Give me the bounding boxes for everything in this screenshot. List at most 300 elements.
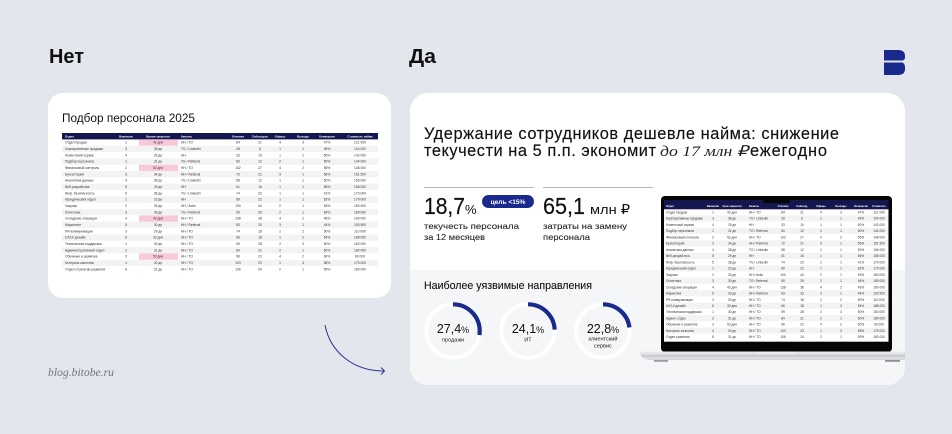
laptop table: 3 [712,242,714,246]
hiring table: 52 дня [153,166,163,170]
laptop table: 5 [712,260,714,264]
hiring table: 45% [324,147,330,151]
laptop table: 189 000 [873,279,885,283]
laptop table: 1 [712,229,714,233]
laptop table: 38 [800,285,804,289]
hiring table: Выходы [297,134,310,138]
hiring table: 58% [324,261,330,265]
laptop table: 29 дн [728,254,736,258]
hiring table: 4 [279,166,281,170]
laptop table: 18 [800,304,804,308]
hiring table: 44 [258,204,262,208]
laptop table: 33 дн [728,273,736,277]
laptop table: 2 [840,304,842,308]
laptop table: 29 [800,279,804,283]
laptop table: 6 [712,304,714,308]
laptop table: TG / Referral [749,229,768,233]
laptop table: 1 [820,217,822,221]
hiring table: HH / ТО [181,217,193,221]
hiring table: 53 дня [153,255,163,259]
laptop table: 142 000 [873,223,885,227]
stat: turnover: % [465,202,477,217]
hiring table: 189 000 [354,210,366,214]
laptop table: Конверсия [854,204,868,208]
laptop table: 1 [820,267,822,271]
laptop table: 69 [781,267,785,271]
hiring table: 6 [125,236,127,240]
hiring table: Закупки [65,204,77,208]
hiring table: 50% [324,179,330,183]
laptop table: HH / ТО [749,298,761,302]
laptop table: 150 000 [873,310,885,314]
hiring table: HH / ТО [181,255,193,259]
donut: IT [501,304,555,358]
laptop table: 41% [858,260,864,264]
hiring table: Бухгалтерия [65,172,84,176]
laptop table: Финансовый контроль [666,235,699,239]
hiring table: HH [181,153,186,157]
hiring table: 21 [258,141,262,145]
laptop table: 4 [712,248,714,252]
hiring table: 84 [236,141,240,145]
hiring table: 121 000 [354,141,366,145]
hiring table: 62% [324,198,330,202]
stat: turnover [424,188,534,242]
arrow [325,325,384,374]
laptop table: 50% [858,223,864,227]
panel: after summary [410,93,905,385]
laptop table: 52 дня [727,235,737,239]
hiring table: 151 500 [354,172,366,176]
laptop table: Отдел [666,204,674,208]
laptop table: 29 дн [728,298,736,302]
hiring table: 1 [302,185,304,189]
laptop table: Закупки [666,273,678,277]
laptop table: 28 [800,310,804,314]
hiring table: 2 [279,248,281,252]
laptop table: 74 [781,298,785,302]
laptop table: HH / Referral [749,292,768,296]
hiring table: 29 [258,210,262,214]
hiring table: Юридический отдел [65,198,96,202]
laptop table: 151 500 [873,242,885,246]
donut: client service: сервис [594,344,612,350]
laptop table: 193 500 [873,292,885,296]
laptop table: 60 000 [874,323,884,327]
hiring table: HH / ТО [181,267,193,271]
laptop table: HH / ТО [749,316,761,320]
hiring table: Время закрытия [146,134,170,138]
laptop table: HH / ТО [749,235,761,239]
hiring table: 156 000 [354,179,366,183]
laptop table: 56% [858,254,864,258]
laptop table: 30 дн [728,292,736,296]
laptop notch [764,197,790,203]
laptop table: 58 [781,248,785,252]
stat: turnover: текучесть персонала [424,221,519,231]
hiring table: HH / ТО [181,141,193,145]
laptop table: Стоимость [872,204,886,208]
hiring table: 180 000 [354,248,366,252]
laptop table: 1 [820,329,822,333]
laptop table: 156 000 [873,248,885,252]
laptop table: 44 [800,273,804,277]
hiring table: Отклики [232,134,244,138]
laptop table: UX/UI дизайн [666,304,686,308]
panel title: Подбор персонала 2025 [62,113,195,125]
hiring table: 2 [125,166,127,170]
laptop table: 2 [840,323,842,327]
hiring table: 29 дн [154,229,162,233]
laptop table: 60 [781,229,785,233]
laptop table: 42 дня [727,210,737,214]
hiring table: 66 [236,236,240,240]
laptop table: Клиентский сервис [666,223,695,227]
hiring table: 59 [236,210,240,214]
hiring table: 10 [258,153,262,157]
laptop table: 2 [712,316,714,320]
hiring table: 4 [279,141,281,145]
hiring table: Аналитика данных [65,179,94,183]
hiring table: HH [181,198,186,202]
laptop table: 59 [781,310,785,314]
hiring table: Складские операции [65,217,97,221]
laptop table: 2 [840,285,842,289]
hiring table: UX/UI дизайн [65,236,86,240]
hiring table: 27 [258,166,262,170]
laptop table: 5 [712,292,714,296]
hiring table: 44% [324,223,330,227]
hiring table: 4 [125,217,127,221]
laptop table: Отклики [778,204,789,208]
laptop table: 4 [712,329,714,333]
laptop table: HH / ТО [749,310,761,314]
hiring table: HH / ТО [181,242,193,246]
hiring table: 42 дня [153,141,163,145]
hiring table: HH / ТО [181,166,193,170]
hiring table: Оферы [275,134,286,138]
laptop table: Веб-разработка [666,254,690,258]
hiring table: 1 [302,204,304,208]
laptop table: 5 [712,254,714,258]
laptop table: HH / ТО [749,304,761,308]
laptop table: Техническая поддержка [666,310,702,314]
laptop table: 27 [800,235,804,239]
source caption: blog.bitobe.ru [48,365,114,379]
laptop table: Подбор персонала [666,229,694,233]
hiring table: 12 [258,160,262,164]
panel: before table [48,93,391,298]
laptop table: 190 000 [873,285,885,289]
laptop table: 104 000 [873,217,885,221]
hiring table: TG / Referral [181,160,200,164]
hiring table: 60 000 [355,255,365,259]
hiring table: 28 [236,147,240,151]
hiring table: 2 [125,248,127,252]
hiring table: 144 000 [354,160,366,164]
laptop table: 32 дня [727,304,737,308]
hiring table: 1 [125,242,127,246]
hiring table: 2 [302,255,304,259]
hiring table: TG / LinkedIn [181,179,201,183]
laptop table: 1 [712,210,714,214]
laptop table: Логистика [666,279,681,283]
laptop table: 158 000 [873,254,885,258]
laptop table: 50% [858,310,864,314]
laptop table: 4 [820,285,822,289]
donut: sales: продажи [442,338,464,344]
laptop table: 96 [781,323,785,327]
hiring table: 42 дня [153,217,163,221]
laptop table: 84 [781,210,785,214]
laptop table: 4 [820,210,822,214]
laptop table: 1 [820,223,822,227]
hiring table: 55% [324,166,330,170]
hiring table: 1 [279,191,281,195]
laptop table: 39 дн [728,279,736,283]
hiring table: 31 дн [154,248,162,252]
laptop table: 3 [820,242,822,246]
donut: sales: 27,4% [437,322,469,336]
hiring table: HH / ТО [181,229,193,233]
hiring table: 1 [279,179,281,183]
laptop table: 50% [858,248,864,252]
laptop table: Отдел развития [666,335,690,339]
hiring table: 180 000 [354,267,366,271]
stat: replacement cost [543,188,653,242]
laptop table: 2 [820,316,822,320]
laptop table: 59 [781,279,785,283]
laptop table: 30 дн [728,329,736,333]
hiring table: 28 [258,242,262,246]
laptop table: 50% [858,298,864,302]
hiring table: 1 [302,198,304,202]
stat: turnover: 18,7 [424,193,465,219]
laptop table: 16 [800,254,804,258]
hiring table: 4 [279,217,281,221]
hiring table: Каналы [181,134,193,138]
section heading: Наиболее уязвимые направления [424,280,592,292]
laptop table: 46% [858,285,864,289]
hiring table: 64% [324,210,330,214]
hiring table: 96 [236,255,240,259]
laptop table: 33 [800,292,804,296]
laptop table: HH / Avito [749,273,763,277]
hiring table: 1 [279,153,281,157]
hiring table: 38 дн [154,191,162,195]
hiring table: 23 [258,191,262,195]
donut: client service: 22,8% [587,322,619,336]
laptop table: HH / Referral [749,242,768,246]
laptop table: 3 [840,329,842,333]
laptop table: HH [749,267,754,271]
hiring table: 4 [125,153,127,157]
hiring table: 38 [258,217,262,221]
donut: client service [576,304,630,358]
hiring table: 50% [324,248,330,252]
laptop table: TG / LinkedIn [749,248,768,252]
hiring table: 39 дн [154,210,162,214]
laptop table: 2 [820,229,822,233]
hiring table: 2 [279,204,281,208]
hiring table: 2 [302,229,304,233]
laptop table: 33 [781,223,785,227]
laptop table: HH [749,254,754,258]
hiring table: HH / Avito [181,204,196,208]
hiring table: 158 000 [354,185,366,189]
target pill: цель <15% [491,199,526,206]
laptop table: 188 000 [873,304,885,308]
hiring table: 2 [302,236,304,240]
laptop table: 4 [820,235,822,239]
laptop table: 6 [801,217,803,221]
hiring table: 47% [324,141,330,145]
laptop table: 10 [800,223,804,227]
laptop table: Контроль качества [666,329,694,333]
hiring table: HH / ТО [181,248,193,252]
laptop table: 47% [858,210,864,214]
hiring table: 18 [258,229,262,233]
laptop table: 21 [800,316,804,320]
hiring table: 50% [324,153,330,157]
laptop table: 2 [820,298,822,302]
laptop table: 23 дн [728,267,736,271]
laptop table: 183 000 [873,273,885,277]
heading: yes: Да [409,46,437,68]
hiring table: Административный отдел [65,248,105,252]
hiring table: 3 [302,242,304,246]
hiring table: 32 дня [153,236,163,240]
laptop table: 1 [820,248,822,252]
hiring table: 102 [235,166,241,170]
hiring table: Техническая поддержка [65,242,102,246]
hiring table: 33 [258,223,262,227]
laptop table: 1 [820,254,822,258]
laptop table: 3 [840,210,842,214]
hiring table: 38 дн [154,179,162,183]
hiring table: 3 [125,229,127,233]
hiring table: TG / LinkedIn [181,191,201,195]
hiring table: 3 [125,210,127,214]
laptop table: Выходы [836,204,847,208]
laptop table: 38 дн [728,248,736,252]
laptop table: 110 000 [873,298,885,302]
hiring table: 5 [125,191,127,195]
laptop table: 38 дн [728,217,736,221]
headline: до 17 млн ₽ [660,144,751,160]
hiring table: 51 [236,185,240,189]
hiring table: 8 [125,267,127,271]
hiring table: 72 [236,172,240,176]
laptop table: 23 [800,329,804,333]
laptop table: Аналитика данных [666,248,694,252]
hiring table: 150 000 [354,242,366,246]
laptop table: 1 [820,304,822,308]
stat: turnover: за 12 месяцев [424,232,486,242]
laptop table: Оферы [816,204,827,208]
hiring table: 3 [125,147,127,151]
headline: текучести на 5 п.п. экономит [424,142,656,160]
hiring table: 2 [302,166,304,170]
laptop table: 23 [800,260,804,264]
hiring table: 2 [125,204,127,208]
hiring table: 5 [125,185,127,189]
hiring table: 54% [324,236,330,240]
hiring table: 74 [236,191,240,195]
laptop table: 28 [781,217,785,221]
laptop table: 1 [712,310,714,314]
hiring table: 175 000 [354,261,366,265]
hiring table: Отдел [65,134,74,138]
laptop table: 3 [712,279,714,283]
hiring table: 50% [324,242,330,246]
hiring table: 33 дн [154,204,162,208]
hiring table: 188 000 [354,236,366,240]
laptop table: 2 [820,279,822,283]
hiring table: 2 [279,210,281,214]
hiring table: 46% [324,217,330,221]
laptop table: 66 [781,304,785,308]
hiring table: 31 дн [154,267,162,271]
laptop table: 53 дня [727,323,737,327]
hiring table: 1 [125,160,127,164]
laptop table: 144 000 [873,229,885,233]
hiring table: 38 дн [154,147,162,151]
hiring table: 170 000 [354,191,366,195]
hiring table: 3 [302,141,304,145]
hiring table: 1 [279,147,281,151]
hiring table: PR-коммуникации [65,229,93,233]
laptop table: 1 [840,223,842,227]
hiring table: 33 [236,153,240,157]
laptop table: 170 000 [873,260,885,264]
hiring table: 2 [302,217,304,221]
laptop table: 83 [781,292,785,296]
hiring table: 193 500 [354,223,366,227]
laptop table: 102 [780,235,786,239]
laptop table: Срок закрытия [722,204,742,208]
hiring table: 6 [259,147,261,151]
laptop table: 180 000 [873,335,885,339]
hiring table: 16 [258,185,262,189]
laptop table: Бухгалтерия [666,242,685,246]
laptop table: 59% [858,335,864,339]
laptop table: 51 [781,254,785,258]
headline [424,125,839,160]
hiring table: 110 000 [354,229,366,233]
laptop table: 1 [840,279,842,283]
laptop table: 1 [840,242,842,246]
hiring table: TG / Referral [181,210,200,214]
laptop table: 1 [820,260,822,264]
donut: client service: клиентский [588,336,618,342]
hiring table: 1 [302,191,304,195]
hiring table: 23 дн [154,198,162,202]
laptop table: TG / LinkedIn [749,260,768,264]
laptop table: 106 [780,335,786,339]
stat: replacement cost: млн ₽ [590,202,630,217]
hiring table: 1 [279,236,281,240]
hiring table: 31 дн [154,160,162,164]
laptop table: 138 [780,285,786,289]
laptop table: TG / Referral [749,279,768,283]
laptop table: 64% [858,279,864,283]
hiring table: 30 дн [154,261,162,265]
hiring table: 1 [302,153,304,157]
hiring table: 183 000 [354,204,366,208]
laptop table: 1 [840,267,842,271]
laptop table: 3 [820,292,822,296]
